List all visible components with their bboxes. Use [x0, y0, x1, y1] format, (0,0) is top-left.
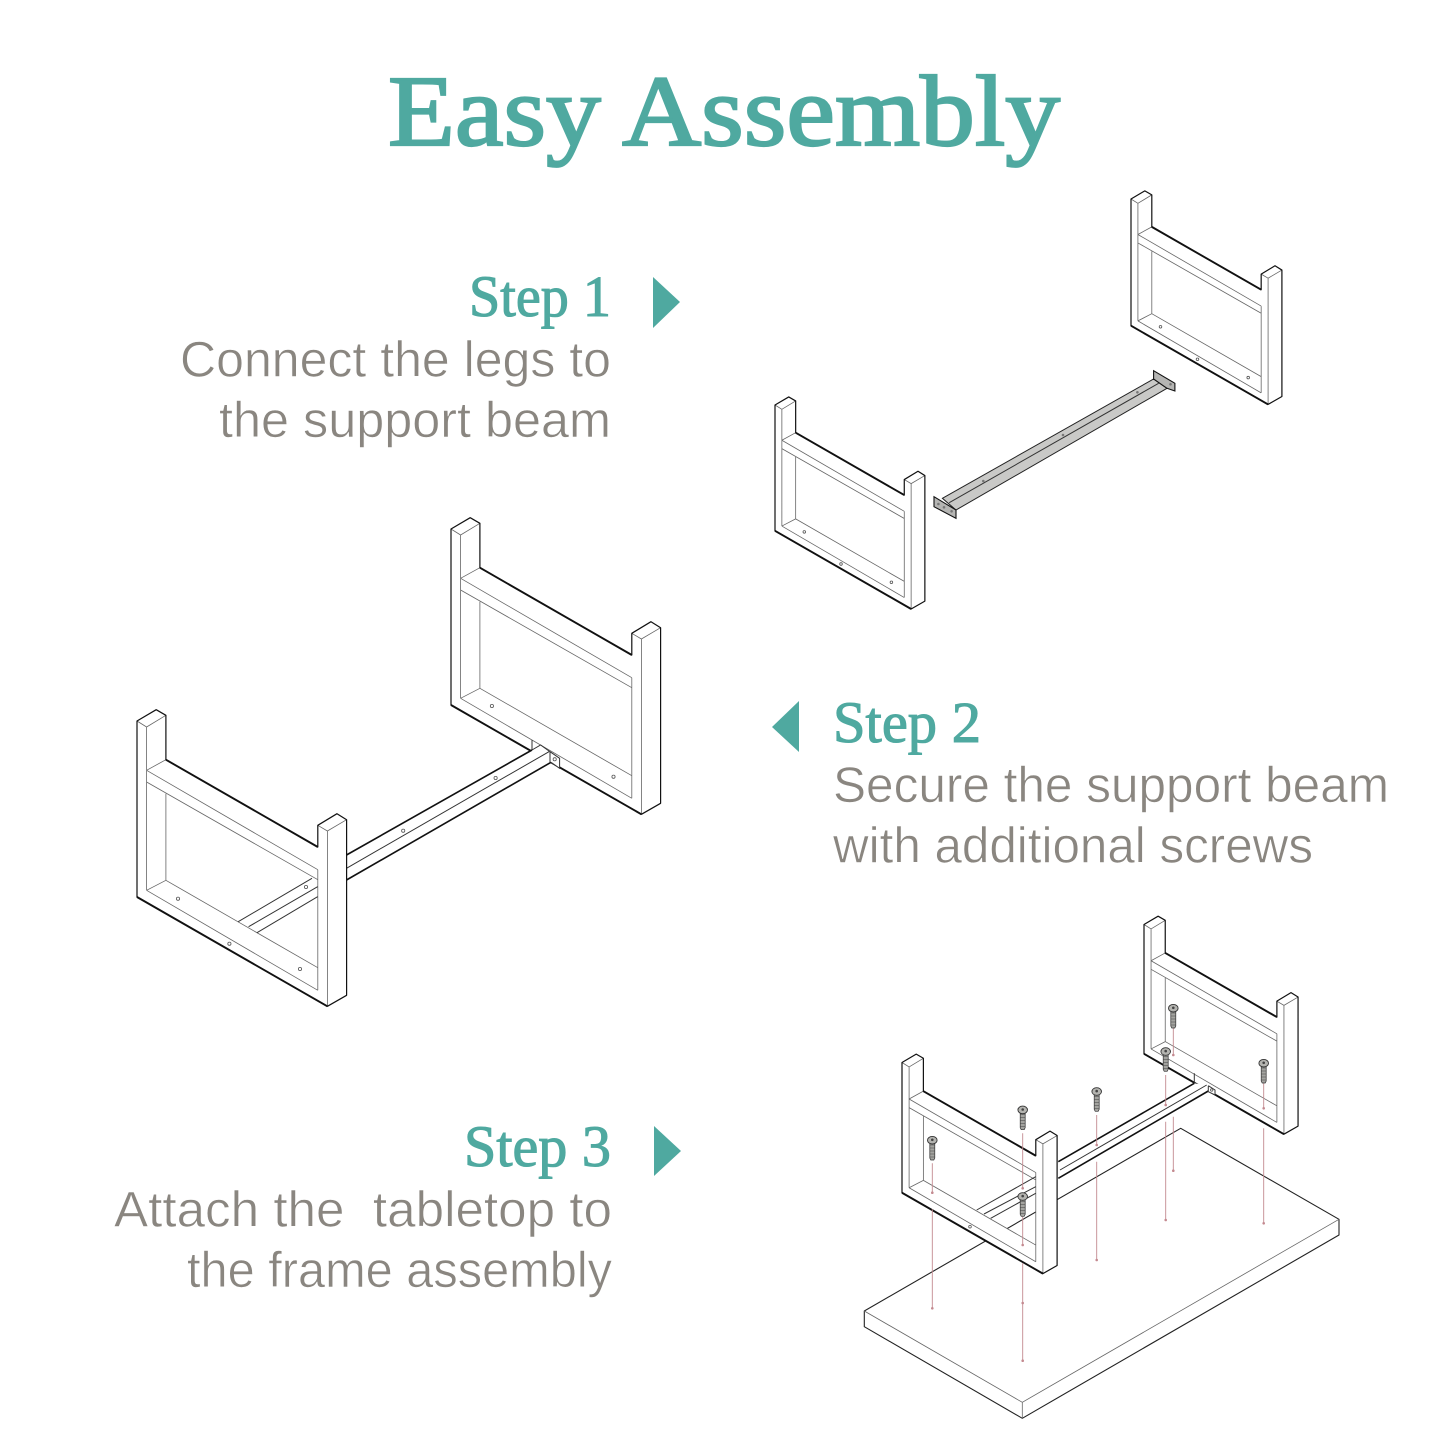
- title: Easy Assembly: [388, 55, 1061, 167]
- step 1 description: [180, 332, 611, 448]
- support beam: [934, 371, 1175, 518]
- support beam: [1058, 1073, 1215, 1178]
- rear leg frame: [1144, 916, 1298, 1134]
- step 1 heading: Step 1: [469, 264, 611, 329]
- screws: [928, 1004, 1268, 1216]
- support beam: [346, 740, 560, 880]
- step 1 arrow: [653, 277, 680, 328]
- step 1 description: Connect the legs to: [180, 332, 611, 388]
- rear leg frame: [451, 518, 661, 814]
- tabletop: [864, 1128, 1339, 1418]
- step 2 heading: Step 2: [833, 690, 981, 755]
- step 3 heading: Step 3: [464, 1114, 611, 1179]
- step 2 description: Secure the support beam: [833, 757, 1389, 813]
- left leg frame: [775, 397, 925, 609]
- step 2 block: [772, 690, 1389, 874]
- step 3 block: [114, 1114, 681, 1298]
- step 1 illustration: legs and support beam: [775, 191, 1282, 609]
- step 3 arrow: [654, 1126, 681, 1176]
- red guide lines: [931, 1028, 1265, 1362]
- step 3 description: the frame assembly: [187, 1242, 612, 1298]
- step 2 arrow: [772, 701, 799, 752]
- step 1 description: the support beam: [219, 392, 611, 448]
- step 2 description: with additional screws: [832, 818, 1313, 874]
- step 3 illustration: frame onto tabletop: [864, 916, 1339, 1418]
- step 2 description: [832, 757, 1389, 874]
- step 1 block: [180, 264, 680, 448]
- front leg frame: [137, 710, 347, 1006]
- step 3 description: [114, 1182, 612, 1298]
- step 3 description: Attach the tabletop to: [114, 1182, 612, 1238]
- step 2 illustration: assembled frame: [137, 518, 661, 1006]
- front leg frame: [902, 1054, 1057, 1274]
- right leg frame: [1131, 191, 1282, 404]
